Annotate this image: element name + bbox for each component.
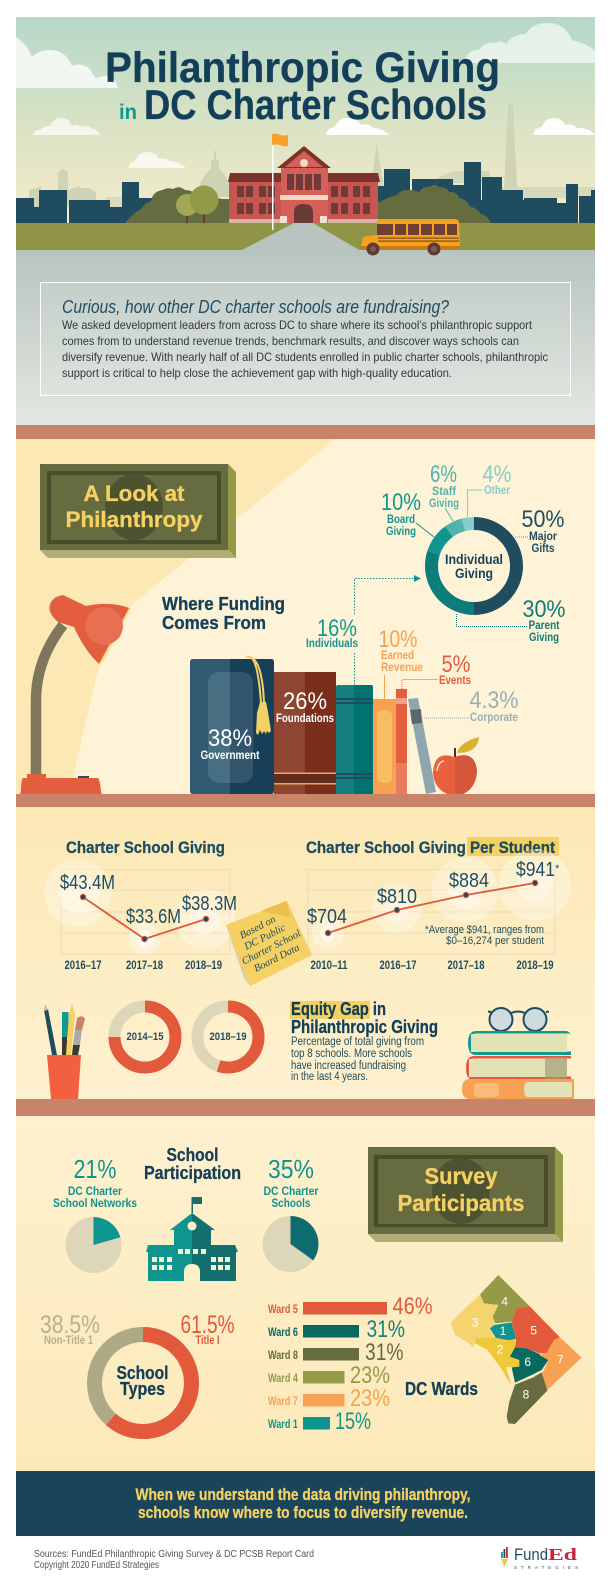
banner: closing message: When we understand the data driving philanthropy, (136, 1486, 470, 1504)
panel: hero scene (16, 17, 595, 250)
chart: equity gap 2018-19: 2018–19 (210, 1031, 246, 1043)
icon: desk lamp (20, 595, 131, 794)
chart: individual giving donut: Giving (455, 566, 493, 581)
labels: earned, events, corporate: 4.3% (470, 687, 518, 714)
labels: earned, events, corporate: 5% (442, 651, 470, 678)
donut labels: 4% (482, 461, 512, 488)
donut labels (381, 461, 566, 644)
heading: where funding comes from (162, 593, 285, 633)
sticky note (226, 901, 312, 986)
sticky note: Charter School (240, 928, 303, 967)
chart: ward bars: 15% (335, 1408, 371, 1435)
chart: giving per student: $704 (307, 906, 347, 928)
chart: ward bars (268, 1293, 432, 1435)
chart: ward bars: Ward 7 (268, 1396, 298, 1408)
book: government: Government (200, 750, 260, 762)
chart: ward bars: Ward 1 (268, 1419, 298, 1431)
chart: charter school giving: $43.4M (60, 872, 115, 894)
panel: intro text box: diversify revenue. With nearly half of all DC students enrolled in public charter schools, philanthropic (62, 350, 548, 364)
map: DC wards (451, 1275, 582, 1424)
chart: ward bars: 23% (350, 1385, 390, 1412)
chart: giving per student: $810 (377, 886, 417, 908)
text block: equity gap: top 8 schools. More schools (291, 1048, 412, 1060)
label: individuals: Individuals (306, 638, 358, 650)
chart: school types donut: Non-Title 1 (44, 1335, 93, 1347)
logo: FundEd Strategies: STRATEGIES (514, 1565, 578, 1570)
chart: charter school giving: 2016–17 (64, 960, 102, 972)
icon: books and glasses (462, 1008, 574, 1099)
footer sources: Sources: FundEd Philanthropic Giving Survey & DC PCSB Report Card (34, 1549, 314, 1560)
icon: school building (146, 1197, 238, 1281)
logo: FundEd Strategies: Fund (514, 1545, 548, 1564)
title (105, 44, 500, 128)
panel: intro text box: We asked development leaders from across DC to share where its school’s philanthropic support (62, 318, 533, 332)
panel: survey participants background (16, 1116, 595, 1471)
sign: survey participants: Participants (398, 1190, 524, 1216)
label: individuals (306, 615, 358, 650)
chart: giving per student (306, 837, 571, 972)
heading: where funding comes from: Where Funding (162, 593, 285, 614)
chart: giving per student: 2010–11 (310, 960, 348, 972)
chart: equity gap 2018-19 (198, 1006, 258, 1068)
chart: charter school giving: Charter School Giving (66, 838, 225, 857)
chart: school types donut (40, 1311, 234, 1432)
chart: giving per student: 2017–18 (448, 960, 485, 972)
school building (228, 146, 380, 223)
bookmark tassel (246, 657, 271, 735)
heading: school participation: School (166, 1145, 218, 1165)
stat: networks pie (53, 1154, 137, 1273)
donut labels: Board (387, 514, 415, 526)
donut labels: 10% (381, 489, 421, 516)
flag (272, 134, 288, 230)
chart: individual giving donut (432, 524, 516, 608)
icon: apple (433, 737, 479, 794)
donut labels: 6% (430, 461, 457, 488)
map: DC wards: 1 (500, 1324, 507, 1338)
panel: giving trends background (16, 807, 595, 1099)
chart: charter school giving: $38.3M (182, 893, 237, 915)
chart: ward bars: 46% (392, 1293, 432, 1320)
chart: ward bars: 31% (366, 1316, 405, 1343)
book: corporate (408, 698, 436, 794)
chart: individual giving donut: Individual (445, 552, 503, 567)
chart: equity gap 2014-15: 2014–15 (126, 1031, 164, 1043)
chart: giving per student: * (555, 863, 560, 875)
banner: closing message (16, 1471, 595, 1536)
text block: equity gap (290, 999, 438, 1083)
sticky note: Board Data (252, 942, 301, 975)
panel: intro text box (40, 282, 570, 396)
panel: intro text box: comes from to understand revenue trends, benchmark results, and discover ways schools can (62, 334, 519, 348)
chart: ward bars: Ward 8 (268, 1350, 298, 1362)
chart: charter school giving: 2018–19 (185, 960, 222, 972)
chart: school types donut: 61.5% (180, 1311, 234, 1339)
labels: earned, events, corporate: 10% (378, 626, 418, 653)
donut labels: Giving (386, 526, 416, 538)
label: individuals: 16% (317, 615, 357, 642)
logo: FundEd Strategies: Ed (548, 1545, 578, 1564)
chart: school types donut: School (116, 1362, 168, 1383)
shelf 1 (16, 425, 595, 439)
donut labels: Staff (432, 486, 456, 498)
map: DC wards: 6 (524, 1355, 531, 1369)
stat: networks pie: 21% (74, 1154, 116, 1184)
bushes (125, 185, 497, 228)
donut labels: Other (484, 485, 510, 497)
donut labels: Giving (529, 632, 559, 644)
distant landmarks (29, 101, 595, 215)
map: DC wards: 8 (523, 1388, 530, 1402)
map: DC wards: 5 (530, 1324, 537, 1338)
grass (16, 223, 595, 250)
sticky note: DC Public (242, 922, 288, 953)
banner: closing message: schools know where to focus to diversify revenue. (138, 1504, 468, 1522)
sign: survey participants (368, 1147, 563, 1242)
arrow: individuals to individual giving (354, 575, 421, 685)
icon: pencil cup (44, 1003, 85, 1099)
panel: intro text box: support is critical to help close the achievement gap with high-quality education. (62, 366, 452, 380)
chart: school types donut: 38.5% (40, 1311, 100, 1339)
donut labels: 30% (522, 596, 566, 623)
chart: ward bars: Ward 6 (268, 1327, 298, 1339)
stat: charter schools pie (262, 1154, 319, 1272)
map: DC wards: 3 (472, 1316, 479, 1330)
text block: equity gap: Percentage of total giving from (291, 1036, 424, 1048)
sign: survey participants: Survey (424, 1163, 498, 1189)
title: DC Charter Schools (144, 81, 487, 128)
chart: giving per student: $941 (516, 859, 555, 881)
book: foundations: Foundations (276, 713, 334, 725)
heading: where funding comes from: Comes From (162, 612, 266, 633)
map: DC wards: 4 (501, 1295, 508, 1309)
chart: giving per student: 2016–17 (380, 960, 416, 972)
stat: charter schools pie: DC Charter (264, 1186, 319, 1198)
chart: giving per student: $0–16,274 per student (446, 935, 544, 947)
donut labels: Gifts (532, 543, 554, 555)
text block: equity gap: Equity Gap in (291, 999, 386, 1019)
chart: charter school giving: 2017–18 (126, 960, 163, 972)
panel: a look at philanthropy background (16, 439, 595, 794)
sign: A Look at Philanthropy: A Look at (84, 481, 185, 506)
chart: ward bars: 23% (350, 1362, 390, 1389)
donut labels: Giving (429, 498, 459, 510)
chart: equity gap 2014-15 (114, 1006, 176, 1068)
shelf 2 (16, 794, 595, 807)
text block: equity gap: Philanthropic Giving (291, 1017, 438, 1037)
labels: earned, events, corporate: Corporate (470, 712, 518, 724)
sign: A Look at Philanthropy: Philanthropy (66, 507, 203, 532)
donut labels: 50% (522, 506, 564, 533)
chart: charter school giving (44, 838, 237, 972)
chart: giving per student: $884 (449, 870, 489, 892)
footer sources (34, 1549, 314, 1571)
labels: earned, events, corporate: Events (439, 675, 471, 687)
icon: school bus (361, 219, 460, 256)
stat: charter schools pie: Schools (272, 1198, 310, 1210)
heading: DC wards: DC Wards (405, 1379, 478, 1399)
chart: ward bars: Ward 4 (268, 1373, 298, 1385)
title: in (119, 101, 137, 124)
book: foundations (274, 672, 336, 794)
trees (176, 186, 218, 224)
donut labels: Parent (528, 620, 560, 632)
book: government (190, 659, 274, 794)
donut labels: Major (529, 531, 557, 543)
panel: intro text box: Curious, how other DC charter schools are fundraising? (62, 297, 449, 317)
labels: earned, events, corporate: Revenue (381, 662, 423, 674)
shelf 3 (16, 1099, 595, 1116)
chart: giving per student: *Average $941, ranges from (425, 924, 544, 936)
city skyline (16, 162, 595, 223)
heading: school participation (144, 1145, 241, 1183)
chart: giving per student: Charter School Giving Per Student (306, 838, 555, 857)
labels: earned, events, corporate: Earned (381, 650, 414, 662)
map: DC wards: 7 (557, 1353, 564, 1367)
text block: equity gap: in the last 4 years. (291, 1071, 368, 1083)
stat: charter schools pie: 35% (268, 1154, 314, 1184)
logo: FundEd Strategies (501, 1545, 578, 1570)
stat: networks pie: School Networks (53, 1198, 137, 1210)
sign: A Look at Philanthropy (40, 464, 236, 558)
chart: ward bars: 31% (365, 1339, 404, 1366)
book: individuals (336, 685, 373, 794)
lower hero background with road (16, 223, 595, 425)
map: DC wards: 2 (497, 1343, 504, 1357)
chart: ward bars: Ward 5 (268, 1304, 298, 1316)
labels: earned, events, corporate (378, 626, 518, 724)
chart: charter school giving: $33.6M (126, 906, 181, 928)
book: events (396, 689, 407, 794)
book: foundations: 26% (283, 688, 327, 715)
clouds (16, 23, 595, 168)
chart: school types donut: Title I (196, 1335, 220, 1347)
book: government: 38% (208, 725, 252, 752)
chart: school types donut: Types (120, 1378, 165, 1399)
sticky note: Based on (238, 914, 278, 942)
footer sources: Copyright 2020 FundEd Strategies (34, 1560, 159, 1571)
book: earned revenue (373, 699, 396, 794)
heading: school participation: Participation (144, 1163, 241, 1183)
text block: equity gap: have increased fundraising (291, 1060, 406, 1072)
stat: networks pie: DC Charter (68, 1186, 122, 1198)
title: Philanthropic Giving (105, 44, 500, 92)
chart: giving per student: 2018–19 (516, 960, 554, 972)
